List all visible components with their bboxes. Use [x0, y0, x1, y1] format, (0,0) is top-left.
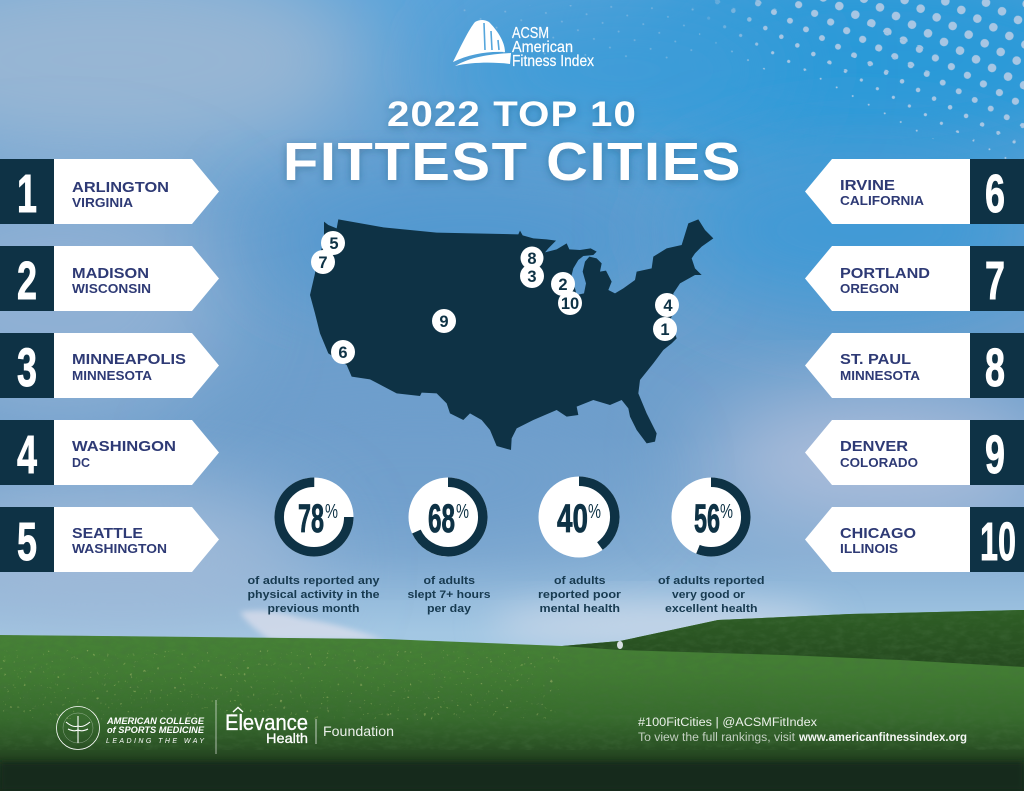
rank 4 Washingon: WASHINGON: [72, 438, 176, 455]
stat: 68 percent: %: [456, 501, 469, 523]
logo: ACSM American Fitness Index: ACSM: [512, 25, 549, 42]
marker 7: [311, 250, 335, 274]
rank 2 Madison: MADISON: [72, 265, 149, 282]
footer: hashtags and website: www.americanfitnessindex.org: [798, 732, 967, 744]
rank 5 Seattle: SEATTLE: [72, 525, 143, 542]
rank 2 Madison: 2: [17, 251, 37, 311]
logo: Elevance Health Foundation: Elevance: [225, 710, 308, 735]
footer: hashtags and website: #100FitCities | @ACSMFitIndex: [638, 717, 817, 729]
rank 5 Seattle: [0, 507, 219, 572]
USA map: [310, 219, 713, 450]
stat: 40 percent: reported poor: [538, 589, 622, 601]
rank 3 Minneapolis: 3: [17, 338, 37, 398]
logo: Elevance Health Foundation: Foundation: [323, 723, 394, 739]
marker 10: 10: [561, 295, 579, 313]
rank 7 Portland: OREGON: [840, 282, 899, 296]
rank 3 Minneapolis: MINNESOTA: [72, 369, 152, 383]
rank 1 Arlington: 1: [17, 164, 37, 224]
rank 10 Chicago: [805, 507, 1024, 572]
halftone dot pattern: [464, 0, 1024, 159]
rank 1 Arlington: VIRGINIA: [72, 196, 133, 210]
marker 9: [432, 309, 456, 333]
marker 7: 7: [318, 254, 328, 272]
logo: Elevance Health Foundation: Health: [266, 730, 308, 746]
marker 9: 9: [439, 313, 449, 331]
stat: 56 percent: of adults reported: [658, 575, 764, 587]
rank 10 Chicago: ILLINOIS: [840, 542, 898, 556]
logo: ACSM American Fitness Index: American: [512, 39, 573, 56]
rank 4 Washingon: DC: [72, 456, 90, 470]
rank 6 Irvine: CALIFORNIA: [840, 194, 924, 208]
rank 9 Denver: DENVER: [840, 438, 908, 455]
stat: 68 percent: 68: [428, 497, 455, 541]
grass hill foreground: [0, 610, 1024, 791]
marker 3: [520, 264, 544, 288]
logo: ACSM American Fitness Index: [453, 20, 594, 70]
marker 2: 2: [558, 276, 568, 294]
rank 1 Arlington: [0, 159, 219, 224]
marker 4: [655, 293, 679, 317]
stat: 68 percent: of adults: [424, 575, 475, 587]
rank 9 Denver: 9: [985, 425, 1005, 485]
footer: hashtags and website: To view the full rankings, visit: [638, 732, 796, 744]
rank 10 Chicago: CHICAGO: [840, 525, 916, 542]
rank 4 Washingon: [0, 420, 219, 485]
rank 3 Minneapolis: MINNEAPOLIS: [72, 351, 186, 368]
stat: 68 percent: slept 7+ hours: [408, 589, 490, 601]
map markers: [311, 231, 679, 364]
rank 1 Arlington: ARLINGTON: [72, 179, 169, 196]
marker 8: 8: [527, 250, 537, 268]
rank 9 Denver: [805, 420, 1024, 485]
stat: 78 percent: %: [325, 501, 338, 523]
rank 7 Portland: 7: [985, 251, 1005, 311]
stat: 68 percent: per day: [427, 603, 472, 615]
stat: 40 percent: of adults: [554, 575, 606, 587]
footer: hashtags and website: [638, 717, 967, 744]
marker 5: 5: [329, 235, 339, 253]
logo: American College of Sports Medicine: of SPORTS MEDICINE: [107, 725, 205, 736]
stat: 68 percent: [408, 478, 490, 615]
logo: American College of Sports Medicine: LEADING THE WAY: [106, 738, 205, 745]
stat: 40 percent: %: [588, 501, 601, 523]
rank 8 St. Paul: 8: [985, 338, 1005, 398]
rank 5 Seattle: WASHINGTON: [72, 542, 167, 556]
rank 6 Irvine: IRVINE: [840, 177, 895, 194]
marker 6: [331, 340, 355, 364]
rank 5 Seattle: 5: [17, 512, 37, 572]
rank 2 Madison: [0, 246, 219, 311]
stat: 78 percent: previous month: [268, 603, 360, 615]
rank 6 Irvine: [805, 159, 1024, 224]
left rankings list: [0, 159, 219, 572]
stat: 40 percent: 40: [557, 497, 588, 541]
stat: 78 percent: physical activity in the: [248, 589, 380, 601]
stat: 56 percent: %: [720, 501, 733, 523]
logo: Elevance Health Foundation: [216, 700, 394, 754]
logo: ACSM American Fitness Index: Fitness Index: [512, 53, 594, 70]
title: FITTEST CITIES: [283, 132, 742, 192]
title: [283, 95, 742, 192]
stat: 40 percent: mental health: [540, 603, 620, 615]
rank 8 St. Paul: MINNESOTA: [840, 369, 920, 383]
stat: 56 percent: [658, 478, 764, 615]
rank 7 Portland: [805, 246, 1024, 311]
rank 8 St. Paul: ST. PAUL: [840, 351, 911, 368]
rank 2 Madison: WISCONSIN: [72, 282, 151, 296]
stat: 56 percent: very good or: [672, 589, 746, 601]
seal: [56, 706, 100, 750]
marker 2: [551, 272, 575, 296]
logo: American College of Sports Medicine: AMERICAN COLLEGE: [106, 716, 205, 727]
marker 5: [321, 231, 345, 255]
logo: American College of Sports Medicine: [56, 706, 205, 750]
stat: 56 percent: excellent health: [665, 603, 758, 615]
rank 7 Portland: PORTLAND: [840, 265, 930, 282]
marker 8: [520, 246, 544, 270]
marker 1: 1: [660, 321, 670, 339]
stat: 56 percent: 56: [694, 497, 720, 541]
rank 8 St. Paul: [805, 333, 1024, 398]
rank 6 Irvine: 6: [985, 164, 1005, 224]
stat: 78 percent: of adults reported any: [248, 575, 380, 587]
stat: 40 percent: [538, 476, 622, 615]
marker 6: 6: [338, 344, 348, 362]
stat: 78 percent: [248, 478, 380, 615]
rank 3 Minneapolis: [0, 333, 219, 398]
right rankings list: [805, 159, 1024, 572]
marker 4: 4: [663, 297, 673, 315]
marker 10: [558, 291, 582, 315]
stat: 78 percent: 78: [298, 497, 324, 541]
marker 1: [653, 317, 677, 341]
marker 3: 3: [527, 268, 537, 286]
rank 9 Denver: COLORADO: [840, 456, 918, 470]
rank 4 Washingon: 4: [17, 425, 37, 485]
title: 2022 TOP 10: [387, 95, 637, 134]
